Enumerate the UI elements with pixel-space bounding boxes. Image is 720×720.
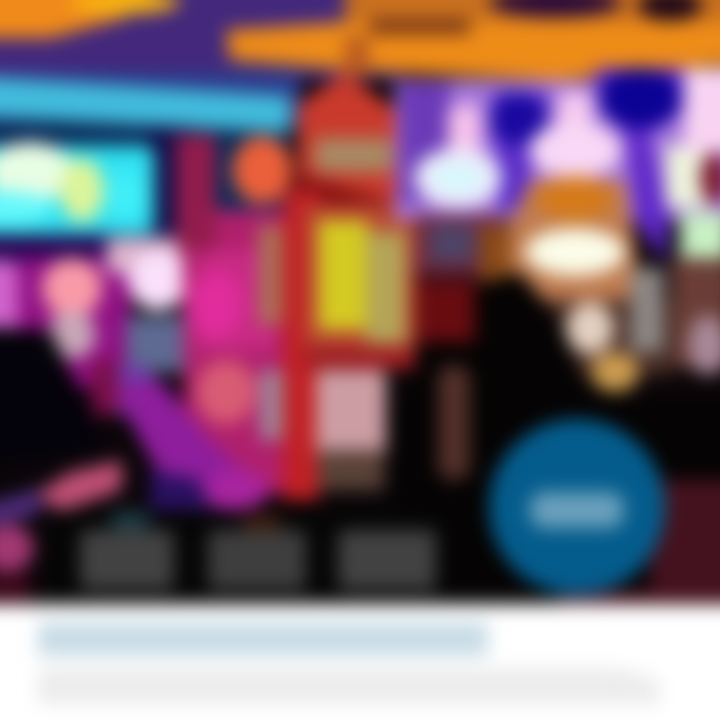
orange ceiling top right [226, 0, 720, 80]
heading: caption title [38, 622, 488, 656]
text block: caption body [38, 668, 660, 704]
glowing cyan sign [0, 142, 154, 234]
right purple banners and white lights [395, 68, 720, 275]
purple ceiling [0, 0, 400, 245]
orange lamp and white glow [480, 152, 720, 392]
orange ceiling top left [0, 0, 195, 38]
callout: blue circle badge [489, 419, 665, 595]
panel: three grey buttons [48, 510, 448, 604]
dark silhouette of player [0, 272, 720, 604]
central pink machine [92, 135, 292, 514]
red slot machine [283, 36, 420, 500]
pink chair highlights [0, 460, 210, 604]
magenta machines left [0, 236, 190, 388]
cyan sign bar [0, 74, 290, 132]
